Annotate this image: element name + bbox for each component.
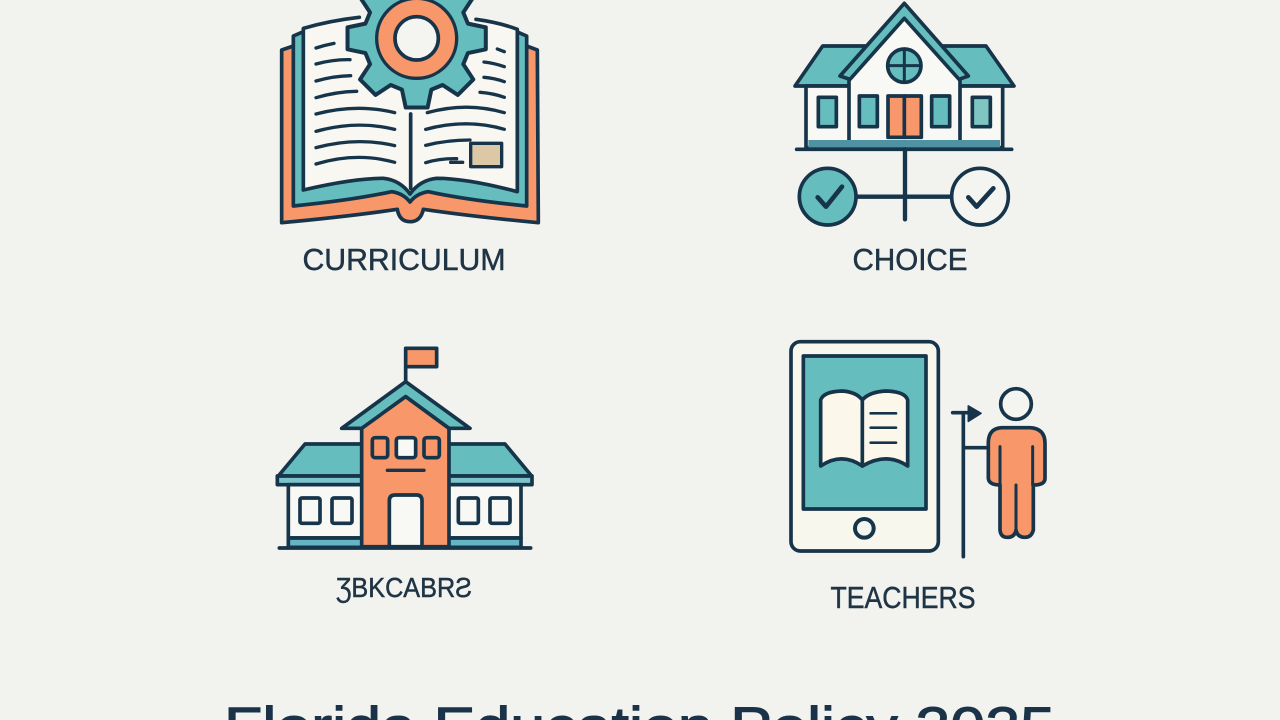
tower windows xyxy=(372,438,388,458)
connector xyxy=(857,149,950,219)
door xyxy=(389,495,422,547)
icon: open book with gear xyxy=(282,0,538,223)
base band xyxy=(808,140,1000,147)
text lines xyxy=(316,43,504,188)
small picture box xyxy=(471,143,502,167)
label: curriculum: CURRICULUM xyxy=(302,242,506,277)
arrow and connector xyxy=(953,413,988,557)
panel: teachers xyxy=(791,342,1045,615)
round window xyxy=(888,49,921,82)
tablet xyxy=(791,342,938,551)
book on screen xyxy=(821,391,908,466)
label: garbled school caption: ƷBKCABRƧ xyxy=(336,572,472,603)
panel: choice xyxy=(795,3,1014,277)
windows and door xyxy=(818,97,836,127)
panel: curriculum xyxy=(282,0,538,277)
icon: school building with flag xyxy=(277,348,532,548)
label: choice: CHOICE xyxy=(852,242,968,277)
side windows xyxy=(300,498,320,523)
gear xyxy=(348,0,486,107)
icon: tablet and teacher xyxy=(791,342,1045,557)
label: teachers: TEACHERS xyxy=(830,580,976,615)
option circles xyxy=(799,168,856,225)
person xyxy=(1001,389,1031,419)
panel: school xyxy=(277,348,532,603)
icon: house with two checked options xyxy=(795,3,1014,225)
